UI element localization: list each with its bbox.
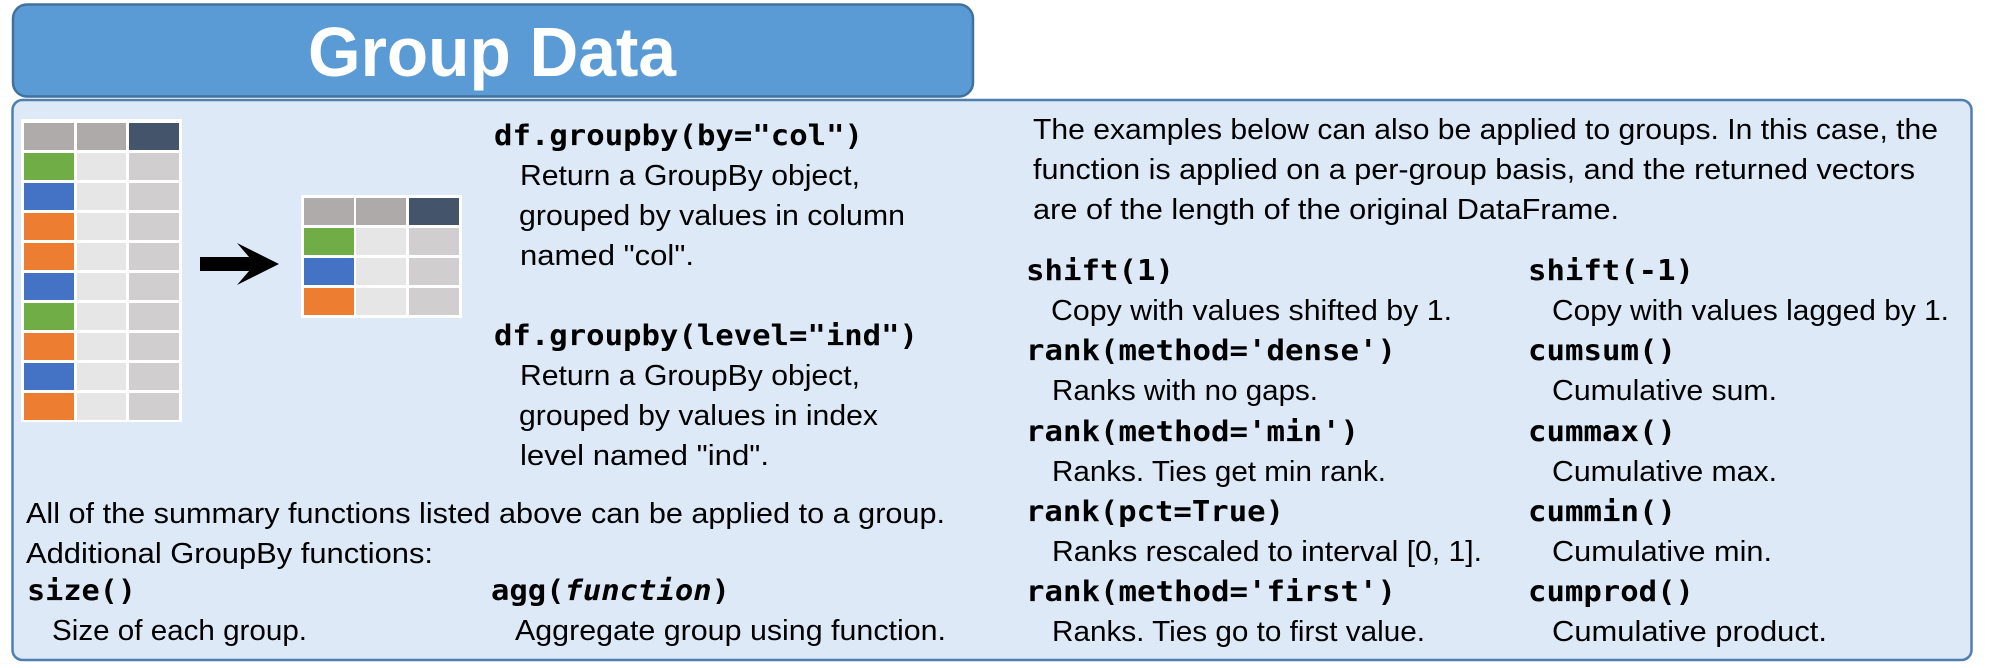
text block: groupby by index level xyxy=(494,319,918,472)
function: rank dense: Ranks with no gaps. xyxy=(1052,375,1318,407)
function: cummax: cummax() xyxy=(1528,415,1676,448)
arrow xyxy=(200,243,279,285)
diagram: grouped table xyxy=(301,195,462,318)
function: cumprod: cumprod() xyxy=(1528,575,1694,608)
function: size xyxy=(27,574,307,647)
text block: groupby by index level: Return a GroupBy object, xyxy=(520,360,860,392)
function: shift(-1): Copy with values lagged by 1. xyxy=(1552,295,1949,327)
function: cumsum: Cumulative sum. xyxy=(1552,375,1777,407)
function: rank dense xyxy=(1026,334,1396,407)
function: rank first xyxy=(1026,575,1425,648)
function: shift(-1) xyxy=(1528,254,1949,327)
function: rank pct: Ranks rescaled to interval [0, 1]. xyxy=(1052,536,1482,568)
function: rank first: Ranks. Ties go to first value. xyxy=(1052,616,1425,648)
function: rank pct: rank(pct=True) xyxy=(1026,495,1284,528)
text block: groupby by column: named "col". xyxy=(520,240,694,272)
function: rank min xyxy=(1026,415,1386,488)
text block: groupby by column: df.groupby(by="col") xyxy=(494,119,863,152)
function: rank min: rank(method='min') xyxy=(1026,415,1359,448)
function: agg xyxy=(491,574,946,647)
function: rank dense: rank(method='dense') xyxy=(1026,334,1396,367)
text block: per-group intro: function is applied on a per-group basis, and the returned vectors xyxy=(1033,154,1915,186)
function: cumprod: Cumulative product. xyxy=(1552,616,1827,648)
text block: groupby by column: Return a GroupBy object, xyxy=(520,160,860,192)
function: cummin xyxy=(1528,495,1772,568)
text block: per-group intro: The examples below can also be applied to groups. In this case, the xyxy=(1033,114,1938,146)
text block: summary functions note: Additional GroupBy functions: xyxy=(26,538,433,570)
function: size: size() xyxy=(27,574,136,607)
text block: summary functions note xyxy=(26,498,945,570)
title banner xyxy=(13,4,973,96)
function: rank pct xyxy=(1026,495,1482,568)
function: shift(1): Copy with values shifted by 1. xyxy=(1051,295,1452,327)
function: cumsum xyxy=(1528,334,1777,407)
text block: groupby by index level: df.groupby(level="ind") xyxy=(494,319,918,352)
function: cummax xyxy=(1528,415,1777,488)
function: shift(1) xyxy=(1026,254,1452,327)
function: cumsum: cumsum() xyxy=(1528,334,1676,367)
function: size: Size of each group. xyxy=(52,615,307,647)
function: agg: Aggregate group using function. xyxy=(515,615,946,647)
function: cummax: Cumulative max. xyxy=(1552,456,1777,488)
function: shift(-1): shift(-1) xyxy=(1528,254,1694,287)
text block: summary functions note: All of the summary functions listed above can be applied to a group. xyxy=(26,498,945,530)
diagram: full table with repeated group values xyxy=(21,119,182,422)
text block: groupby by index level: level named "ind". xyxy=(520,440,769,472)
function: cummin: Cumulative min. xyxy=(1552,536,1772,568)
text block: groupby by column: grouped by values in column xyxy=(519,200,905,232)
function: cumprod xyxy=(1528,575,1827,648)
function: shift(1): shift(1) xyxy=(1026,254,1174,287)
function: cummin: cummin() xyxy=(1528,495,1676,528)
text block: per-group intro: are of the length of the original DataFrame. xyxy=(1033,194,1619,226)
function: agg: agg(function ) xyxy=(491,574,730,607)
function: rank first: rank(method='first') xyxy=(1026,575,1396,608)
text block: per-group intro xyxy=(1033,114,1938,226)
function: rank min: Ranks. Ties get min rank. xyxy=(1052,456,1386,488)
title: Group Data xyxy=(308,13,677,91)
text block: groupby by index level: grouped by values in index xyxy=(519,400,879,432)
text block: groupby by column xyxy=(494,119,905,272)
